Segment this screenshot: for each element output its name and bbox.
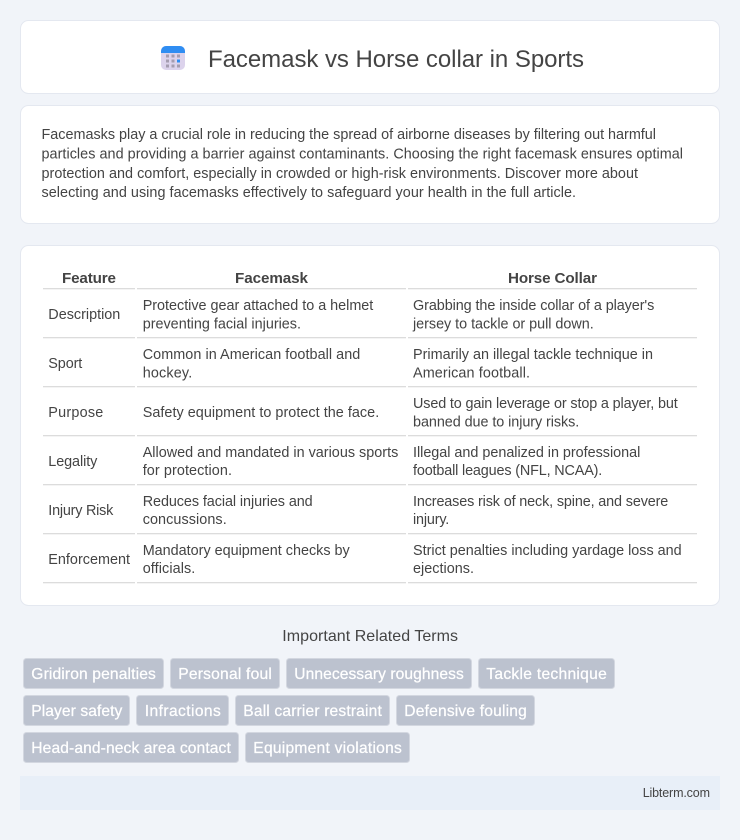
chip: Unnecessary roughness: Unnecessary roughness xyxy=(294,666,464,683)
footer xyxy=(20,776,720,810)
table row: injury risk: injury. xyxy=(413,512,449,528)
icon: calendar xyxy=(161,46,185,70)
table row: legality: Allowed and mandated in various sports xyxy=(143,445,398,461)
table header row xyxy=(43,270,697,289)
panel: header xyxy=(20,20,720,94)
panel: introduction xyxy=(20,106,720,224)
chip: Gridiron penalties: Gridiron penalties xyxy=(31,666,156,683)
table row: injury risk: concussions. xyxy=(143,512,227,528)
text block: intro paragraph: particles and providing a barrier against contaminants. Choosing the right facemask ensures optimal xyxy=(42,146,683,162)
chip: Infractions xyxy=(136,696,228,726)
table row: sport: Primarily an illegal tackle technique in xyxy=(413,347,653,363)
table row: enforcement: Mandatory equipment checks by xyxy=(143,543,350,559)
table row: description: jersey to tackle or pull down. xyxy=(412,316,594,332)
table row: description: preventing facial injuries. xyxy=(143,316,301,332)
table row: description xyxy=(43,298,697,338)
chip: Infractions: Infractions xyxy=(145,703,221,720)
text block: intro paragraph: protection and comfort, especially in crowded or high-risk environments. Discover more about xyxy=(42,166,638,182)
table row: legality: Legality xyxy=(48,454,98,470)
table row: purpose: banned due to injury risks. xyxy=(413,414,579,430)
chip: Tackle technique: Tackle technique xyxy=(486,666,607,683)
title: Facemask vs Horse collar in Sports xyxy=(208,46,584,73)
table row: sport: Sport xyxy=(48,356,82,372)
table row: injury risk: Reduces facial injuries and xyxy=(143,494,313,510)
table row: enforcement: ejections. xyxy=(413,561,474,577)
table row: enforcement: Enforcement xyxy=(48,552,130,568)
table row: enforcement xyxy=(43,543,697,583)
table row: legality: Illegal and penalized in professional xyxy=(413,445,640,461)
chip: Gridiron penalties xyxy=(24,658,164,688)
table header row: Facemask xyxy=(235,270,309,287)
table row: injury risk: Injury Risk xyxy=(48,503,114,519)
table row: injury risk xyxy=(43,494,697,534)
chip: Unnecessary roughness xyxy=(286,658,472,688)
chip: Equipment violations xyxy=(246,732,410,762)
table header row: Feature xyxy=(62,270,116,287)
panel: related term chips xyxy=(24,658,614,762)
text block: intro paragraph xyxy=(42,127,683,201)
chip: Personal foul: Personal foul xyxy=(178,666,272,683)
chip: Defensive fouling xyxy=(396,696,534,726)
chip: Ball carrier restraint xyxy=(236,696,390,726)
heading: related terms: Important Related Terms xyxy=(282,628,458,645)
text block: intro paragraph: selecting and using facemasks effectively to safeguard your health in the full article. xyxy=(42,185,576,201)
table header row: Horse Collar xyxy=(508,270,597,287)
table row: injury risk: Increases risk of neck, spine, and severe xyxy=(413,494,668,510)
footer credit: Libterm.com xyxy=(643,786,710,800)
table row: sport: American football. xyxy=(413,365,530,381)
table row: description: Protective gear attached to a helmet xyxy=(143,298,373,314)
table row: enforcement: Strict penalties including yardage loss and xyxy=(413,543,682,559)
chip: Defensive fouling: Defensive fouling xyxy=(404,703,527,720)
table row: legality: for protection. xyxy=(143,463,232,479)
table row: legality: football leagues (NFL, NCAA). xyxy=(413,463,602,479)
chip: Player safety: Player safety xyxy=(31,703,123,720)
chip: Ball carrier restraint: Ball carrier restraint xyxy=(243,703,382,720)
table row: purpose: Used to gain leverage or stop a player, but xyxy=(413,396,678,412)
chip: Head-and-neck area contact xyxy=(24,732,238,762)
table row: description: Description xyxy=(48,307,120,323)
table row: purpose xyxy=(43,396,697,436)
table row: description: Grabbing the inside collar of a player's xyxy=(413,298,654,314)
table row: enforcement: officials. xyxy=(143,561,195,577)
panel: comparison table xyxy=(20,246,720,606)
chip: Tackle technique xyxy=(478,658,614,688)
text block: intro paragraph: Facemasks play a crucial role in reducing the spread of airborne diseases by filtering out harmful xyxy=(42,127,656,143)
table row: purpose: Purpose xyxy=(48,405,103,421)
table row: sport: hockey. xyxy=(143,365,192,381)
chip: Head-and-neck area contact: Head-and-neck area contact xyxy=(31,740,231,757)
chip: Equipment violations: Equipment violations xyxy=(253,740,402,757)
table row: legality xyxy=(43,445,697,485)
table row: sport xyxy=(43,347,697,387)
table row: purpose: Safety equipment to protect the face. xyxy=(143,405,379,421)
chip: Player safety xyxy=(24,696,130,726)
table row: sport: Common in American football and xyxy=(143,347,360,363)
chip: Personal foul xyxy=(170,658,280,688)
